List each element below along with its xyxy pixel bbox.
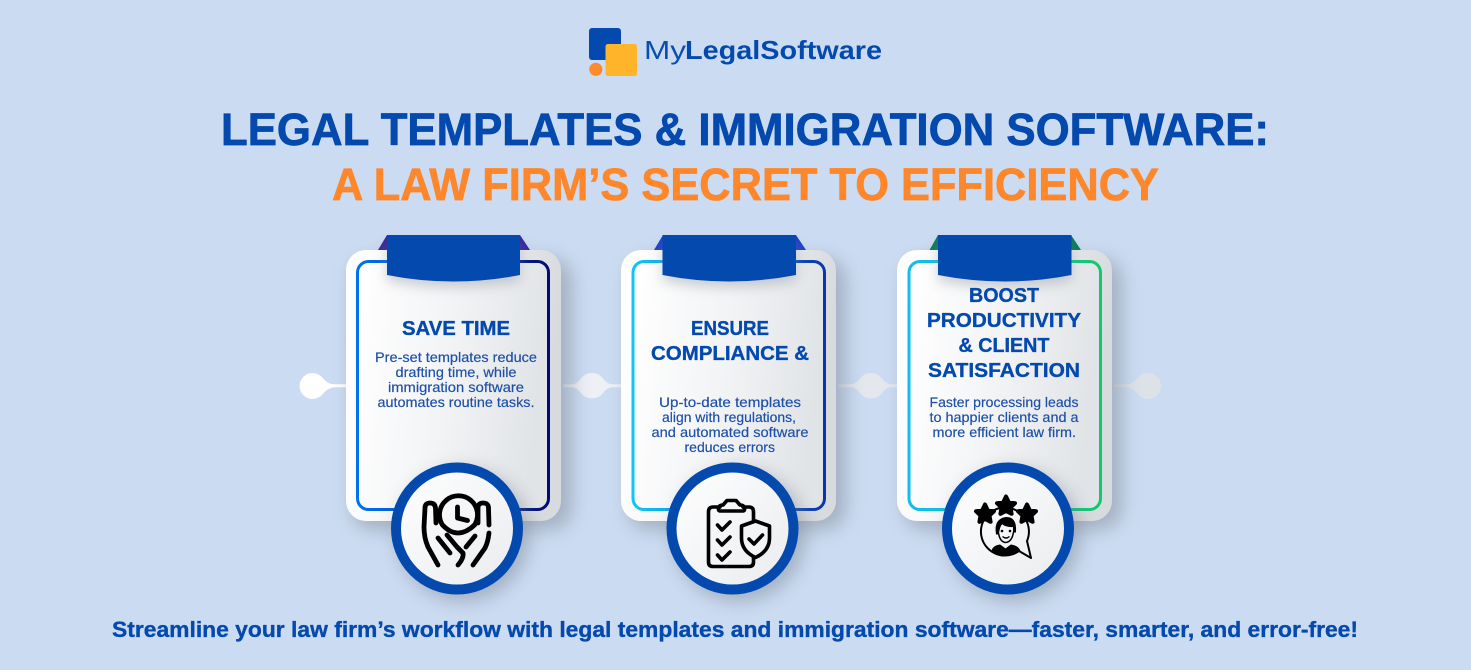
card 2 border [633,262,824,510]
card 2 text: and automated software [652,425,808,440]
card 3 body [897,250,1112,521]
card 2 text: Up-to-date templates [659,395,801,410]
card 2 ribbon [662,235,796,288]
panel: save time [346,235,572,601]
card 1 text: Pre-set templates reduce [375,350,537,365]
card 1 heading: SAVE TIME [402,317,510,340]
card 1 text: immigration software [388,380,524,395]
card 3 heading: & CLIENT [958,334,1050,357]
card 2 body [621,250,836,521]
connector nodes [300,373,1161,399]
card 1 text: automates routine tasks. [378,395,534,410]
icon: client with rating stars [976,496,1036,558]
card 1 text [375,350,537,410]
card 3 text: Faster processing leads [930,395,1079,410]
card 3 ribbon flaps [930,235,1081,250]
logo: LegalSoftware [685,35,882,65]
card 2 heading: COMPLIANCE & [651,342,809,365]
card 3 ribbon [938,235,1072,288]
panel: ensure compliance [621,235,846,601]
card 2 heading [651,317,809,365]
card 2 text: align with regulations, [662,410,796,425]
card 1 shadow [352,258,572,530]
card 3 heading [927,284,1081,382]
icon: clipboard and shield [708,500,770,566]
card 2 ribbon flaps [654,235,806,250]
card 2 text: reduces errors [684,440,775,455]
card 1 body [346,250,561,521]
card 1 border [358,262,548,510]
card 1 ribbon flaps [378,235,530,250]
card 1 text: drafting time, while [396,365,516,380]
title: A LAW FIRM’S SECRET TO EFFICIENCY [332,159,1159,210]
card 3 border [909,262,1100,510]
logo [589,28,882,76]
logo: My [644,35,686,65]
card 3 circle badge [947,468,1080,601]
card 3 shadow [904,258,1122,530]
card 2 shadow [628,258,846,530]
title: LEGAL TEMPLATES & IMMIGRATION SOFTWARE: [221,104,1269,155]
card 1 circle badge [396,468,529,601]
icon: hands holding clock [424,496,489,565]
card 3 text [930,395,1079,440]
card 3 heading: SATISFACTION [928,359,1080,382]
card 2 text [652,395,808,455]
card 2 circle badge [672,468,805,601]
card 3 heading: BOOST [969,284,1039,307]
card 3 heading: PRODUCTIVITY [927,309,1081,332]
card 1 ribbon [387,235,520,288]
title [221,104,1269,210]
card 3 text: to happier clients and a [930,410,1079,425]
card 2 heading: ENSURE [691,317,769,340]
panel: boost productivity [897,235,1122,601]
card 3 text: more efficient law firm. [932,425,1076,440]
footer tagline: Streamline your law firm’s workflow with legal templates and immigration software—faster, smarter, and error-free! [112,617,1358,642]
